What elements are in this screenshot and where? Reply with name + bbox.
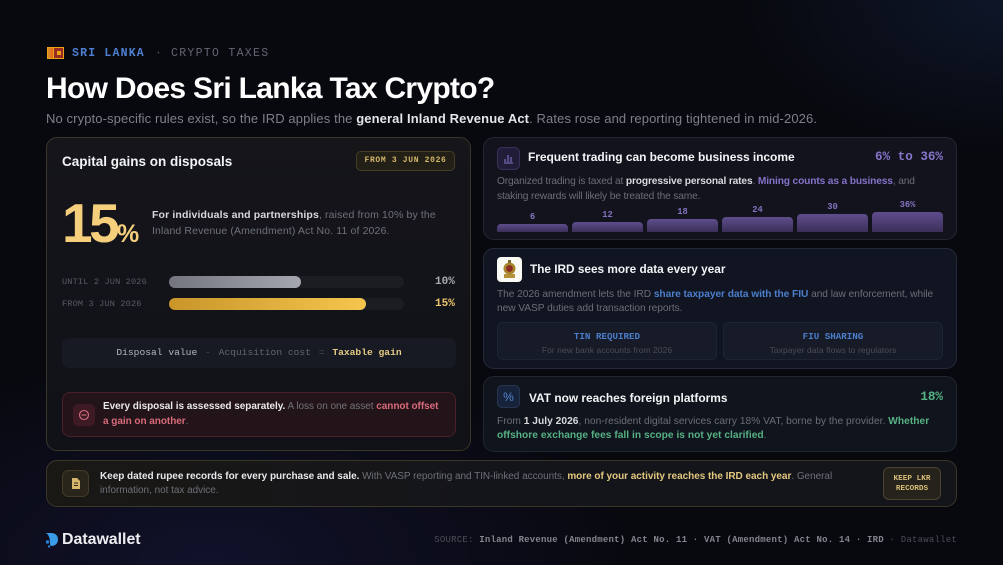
bar row: from 3 Jun 2026 — [62, 298, 455, 310]
icon: percent — [497, 385, 520, 408]
text: VAT details — [497, 416, 930, 441]
text: data sharing: new VASP duties add transaction reports. — [497, 303, 682, 314]
eyebrow: CRYPTO TAXES — [171, 47, 269, 60]
bar row: from 3 Jun 2026: 15% — [435, 298, 455, 310]
heading: VAT: VAT now reaches foreign platforms — [529, 391, 727, 405]
callout: losses — [62, 392, 456, 437]
formula — [62, 338, 456, 368]
icon: document — [62, 470, 89, 497]
rate: 18%: 18% — [920, 390, 943, 404]
card: TIN required — [497, 322, 717, 360]
badge: keep LKR records: KEEP LKR — [894, 474, 930, 482]
bar row: until 2 Jun 2026 — [62, 276, 455, 288]
text: data sharing — [497, 288, 933, 314]
text: progressive rates: Organized trading is taxed at progressive personal rates. Mining counts as a business, and — [497, 176, 915, 187]
title: How Does Sri Lanka Tax Crypto? — [46, 72, 495, 105]
text: VAT details: From 1 July 2026, non-resident digital services carry 18% VAT, borne by the provider. Whether — [497, 416, 929, 426]
icon: Sri Lanka flag — [47, 47, 64, 59]
bar chart: rates: 6 — [530, 212, 535, 222]
eyebrow: SRI LANKA — [72, 47, 145, 60]
source line: SOURCE: Inland Revenue (Amendment) Act No. 11 · VAT (Amendment) Act No. 14 · IRD · Datawallet — [434, 535, 957, 545]
heading: business income: Frequent trading can become business income — [528, 150, 795, 164]
panel: IRD data — [483, 248, 957, 369]
heading: IRD data: The IRD sees more data every year — [530, 262, 725, 276]
panel: business income: 36% — [900, 200, 915, 210]
text: record keeping — [100, 471, 832, 496]
text: record keeping: information, not tax advice. — [100, 485, 219, 496]
wordmark: Datawallet — [62, 531, 141, 548]
text: losses — [103, 401, 438, 427]
card: FIU sharing: Taxpayer data flows to regulators — [770, 345, 896, 355]
icon: percent: % — [503, 390, 514, 404]
icon: Datawallet mark — [46, 533, 58, 548]
bar row: until 2 Jun 2026: UNTIL 2 JUN 2026 — [62, 277, 147, 287]
text: who it applies to — [152, 209, 436, 236]
panel: VAT — [483, 376, 957, 452]
panel: record keeping — [46, 460, 957, 507]
bar chart: rates: 18 — [677, 207, 688, 217]
text: data sharing: The 2026 amendment lets the IRD share taxpayer data with the FIU and law enforcement, while — [497, 288, 933, 300]
bar row: from 3 Jun 2026: FROM 3 JUN 2026 — [62, 299, 142, 309]
panel: business income — [483, 137, 957, 240]
card: FIU sharing — [723, 322, 943, 360]
bar row: until 2 Jun 2026: 10% — [435, 276, 455, 288]
icon: bar chart — [497, 147, 520, 170]
heading: capital gains: Capital gains on disposals — [62, 154, 232, 169]
badge: keep LKR records: RECORDS — [896, 485, 928, 493]
rate: 6% to 36%: 6% to 36% — [875, 150, 943, 164]
text: progressive rates: staking rewards will likely be treated the same. — [497, 191, 700, 202]
panel: business income: 30 — [827, 202, 838, 212]
formula: Disposal value - Acquisition cost = Taxable gain — [116, 347, 402, 358]
logo: Datawallet — [46, 531, 141, 548]
stat: 15 percent: % — [117, 220, 139, 248]
subtitle: No crypto-specific rules exist, so the IRD applies the general Inland Revenue Act. Rates rose and reporting tightened in mid-2026. — [46, 111, 817, 126]
bar chart: rates — [497, 200, 943, 232]
text: record keeping: Keep dated rupee records for every purchase and sale. With VASP reporting and TIN-linked accounts, more of your activity reaches the IRD each year. General — [100, 471, 832, 482]
eyebrow: · — [155, 47, 163, 60]
bar chart: rates: 24 — [752, 205, 763, 215]
stat: 15 percent: 15 — [62, 192, 116, 254]
text: losses: a gain on another. — [103, 416, 188, 427]
text: losses: Every disposal is assessed separately. A loss on one asset cannot offset — [103, 401, 438, 412]
icon: minus circle — [73, 404, 95, 426]
card: FIU sharing: FIU SHARING — [803, 331, 863, 342]
text: progressive rates — [497, 176, 915, 202]
badge: keep LKR records — [883, 467, 941, 500]
icon: Sri Lanka emblem — [497, 257, 522, 282]
text: who it applies to: For individuals and partnerships, raised from 10% by the — [152, 209, 436, 221]
badge: from 3 Jun 2026: FROM 3 JUN 2026 — [364, 156, 447, 165]
card: TIN required: For new bank accounts from 2026 — [542, 345, 672, 355]
card: TIN required: TIN REQUIRED — [574, 331, 640, 342]
panel: capital gains — [46, 137, 471, 451]
bar chart: rates: 12 — [602, 210, 613, 220]
text: VAT details: offshore exchange fees fall in scope is not yet clarified. — [497, 430, 767, 441]
badge: from 3 Jun 2026 — [356, 151, 455, 171]
eyebrow — [47, 47, 269, 60]
text: who it applies to: Inland Revenue (Amendment) Act No. 11 of 2026. — [152, 224, 390, 236]
